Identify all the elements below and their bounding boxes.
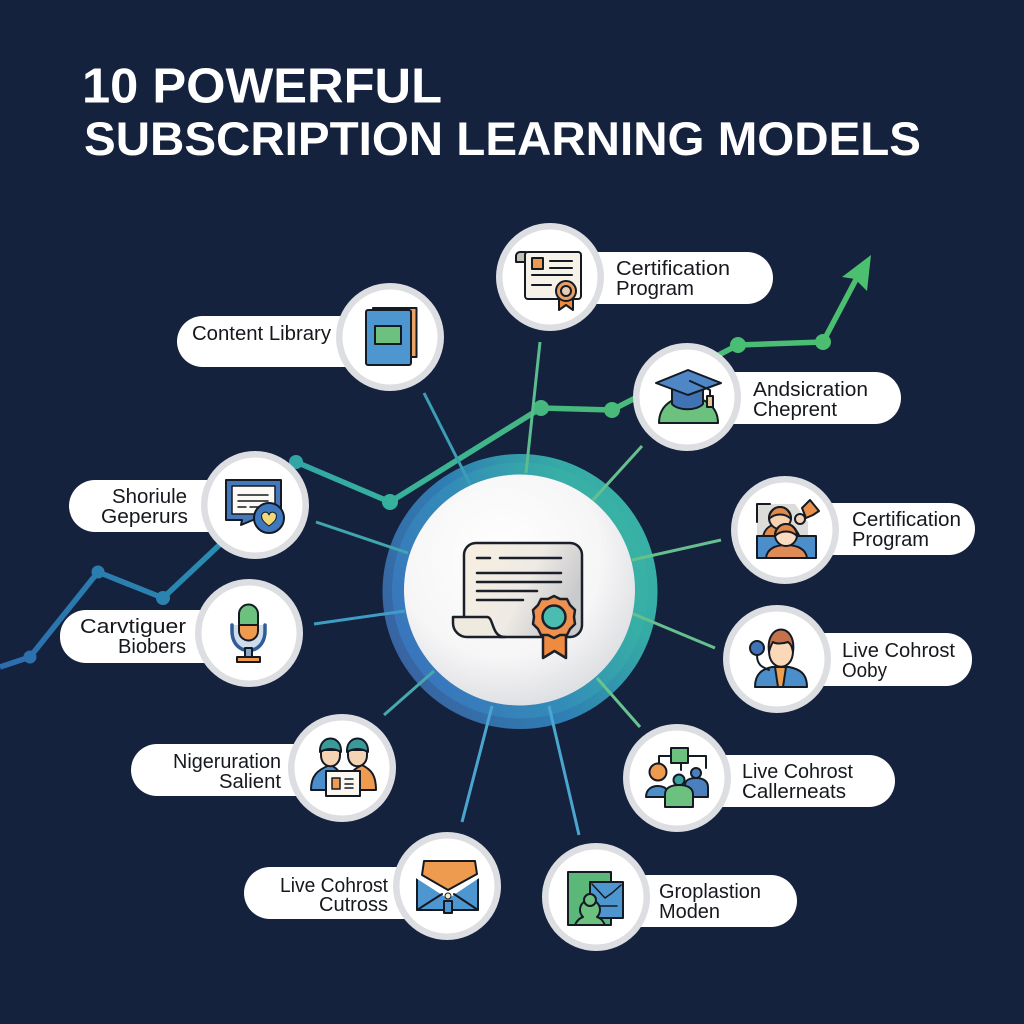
icon: envelope (417, 861, 478, 913)
panel: Shoriule Geperurs: Geperurs (101, 506, 188, 528)
panel: Groplastion Moden: Moden (659, 901, 720, 923)
label: Live Cohrost Ooby: Live Cohrost (842, 640, 955, 662)
icon: central certificate (453, 543, 582, 658)
title: SUBSCRIPTION LEARNING MODELS (84, 112, 921, 165)
central hub: certificate (404, 474, 635, 706)
icon: person with headset (750, 630, 807, 687)
panel: Groplastion Moden (542, 843, 797, 951)
icon: graduation cap (656, 370, 721, 423)
panel: Live Cohrost Cutross: Cutross (319, 894, 388, 916)
label: Andsicration Cheprent: Andsicration (753, 379, 868, 401)
label: Content Library: Content Library (192, 323, 331, 345)
panel: Carvtiguer Biobers (60, 579, 303, 687)
panel: Certification Program (top): Program (616, 278, 694, 300)
panel: Andsicration Cheprent: Cheprent (753, 399, 837, 421)
icon: book (366, 308, 416, 365)
icon: microphone (232, 604, 265, 662)
panel: Live Cohrost Callerneats: Callerneats (742, 781, 846, 803)
icon: chat certificate with heart badge (226, 480, 284, 533)
title: 10 POWERFUL (82, 60, 442, 114)
panel: Carvtiguer Biobers: Biobers (118, 636, 186, 658)
label: Certification Program: Certification (852, 509, 961, 531)
hub outer ring (382, 454, 658, 729)
label: Live Cohrost Cutross: Live Cohrost (280, 875, 388, 897)
label: Nigeruration Salient: Nigeruration (173, 751, 281, 773)
icon: two people with badge (311, 738, 376, 796)
icon: chart document with person (568, 872, 623, 925)
label: Groplastion Moden: Groplastion (659, 881, 761, 903)
label: Carvtiguer Biobers: Carvtiguer (80, 616, 186, 638)
panel: Certification Program (right) (731, 476, 975, 584)
panel: Live Cohrost Cutross (244, 832, 501, 940)
panel: Live Cohrost Ooby (723, 605, 972, 713)
icon: org chart team (646, 748, 708, 807)
growth trend line with arrow (0, 255, 871, 667)
label: Certification Program: Certification (616, 258, 730, 280)
label: Shoriule Geperurs: Shoriule (112, 486, 187, 508)
icon: diploma scroll (516, 252, 581, 310)
title (82, 60, 921, 165)
panel: Certification Program (right): Program (852, 529, 929, 551)
panel: Nigeruration Salient: Salient (219, 771, 281, 793)
panel: Content Library (177, 283, 444, 391)
panel: Certification Program (top) (496, 223, 773, 331)
panel: Andsicration Cheprent (633, 343, 901, 451)
panel: Live Cohrost Ooby: Ooby (842, 660, 887, 682)
panel: Live Cohrost Callerneats (623, 724, 895, 832)
connector lines (314, 342, 721, 835)
panel: Shoriule Geperurs (69, 451, 309, 559)
panel: Nigeruration Salient (131, 714, 396, 822)
icon: group with presentation (757, 500, 819, 558)
label: Live Cohrost Callerneats: Live Cohrost (742, 761, 853, 783)
